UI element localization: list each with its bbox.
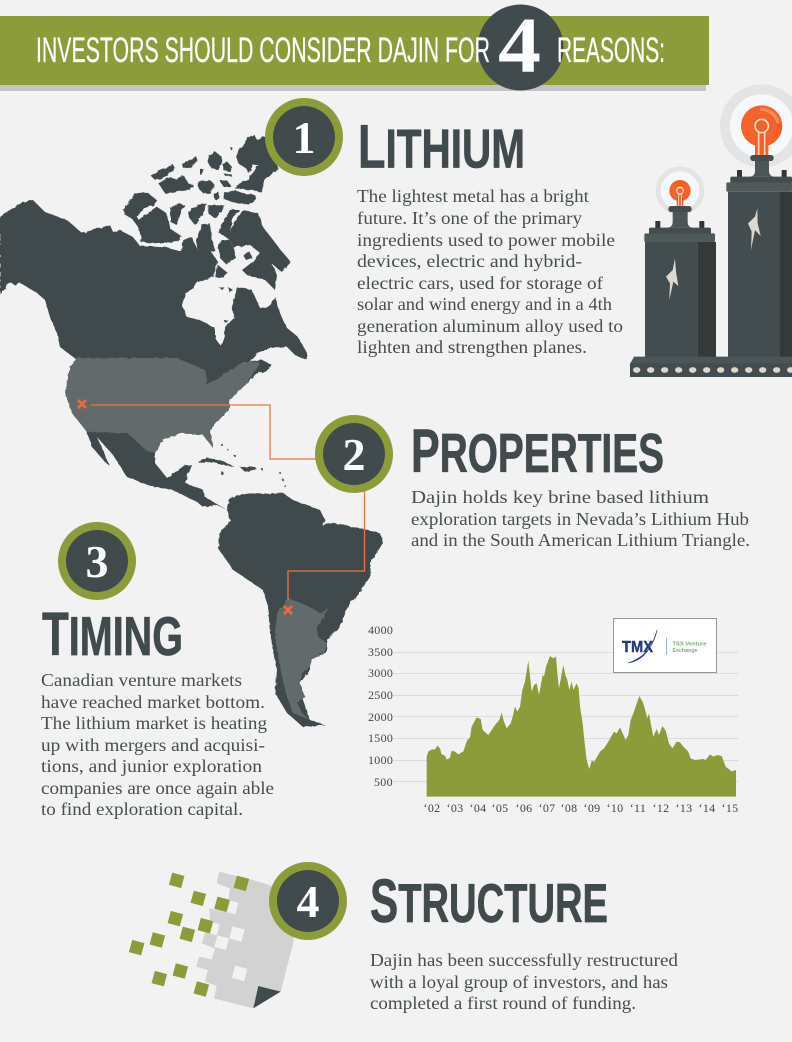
- map: Arctic islands: [123, 135, 278, 257]
- text: Lithium: future. It’s one of the primary: [357, 208, 582, 228]
- map: North America mainland: [0, 200, 307, 510]
- battery base: [630, 357, 792, 377]
- x axis labels: ‘10: [607, 801, 623, 815]
- text: Timing: Canadian venture markets: [41, 670, 242, 690]
- icon: dissolving document: [129, 872, 294, 1008]
- logo: TMX: [614, 618, 716, 672]
- heading: Timing: TIMING: [42, 600, 183, 668]
- x axis labels: ‘02: [424, 801, 440, 815]
- right battery: [720, 84, 792, 357]
- text: Lithium: The lightest metal has a bright: [357, 186, 589, 206]
- logo: TMX: Exchange: [672, 648, 698, 654]
- x axis labels: [424, 801, 738, 815]
- y axis labels: 3000: [368, 666, 393, 680]
- heading: Properties: PROPERTIES: [411, 417, 664, 485]
- text: Properties: [411, 487, 750, 550]
- text: Properties: and in the South American Lithium Triangle.: [411, 530, 750, 550]
- text: Structure: Dajin has been successfully restructured: [370, 950, 678, 970]
- y axis labels: 1500: [368, 731, 393, 745]
- text: Lithium: lighten and strengthen planes.: [357, 337, 587, 357]
- x axis labels: ‘04: [470, 801, 486, 815]
- left battery: [644, 166, 716, 357]
- text: Properties: exploration targets in Nevada’s Lithium Hub: [411, 509, 749, 529]
- area chart: TSX Venture index: [368, 618, 738, 815]
- text: Structure: with a loyal group of investors, and has: [370, 972, 668, 992]
- y axis labels: 2000: [368, 710, 393, 724]
- logo: TMX: TSX Venture: [672, 642, 706, 648]
- text: Timing: tions, and junior exploration: [41, 756, 262, 776]
- x axis labels: ‘14: [699, 801, 715, 815]
- map: Argentina: [275, 598, 328, 720]
- x axis labels: ‘08: [561, 801, 577, 815]
- text: Structure: [370, 950, 678, 1013]
- green pixels: [129, 873, 249, 997]
- icon: batteries with light bulbs: [630, 84, 792, 377]
- map: Baffin Island: [218, 210, 291, 290]
- map: United States: [65, 358, 260, 453]
- title banner: REASONS:: [557, 31, 665, 70]
- text: Timing: up with mergers and acquisi-: [41, 735, 265, 755]
- title banner: [0, 3, 709, 91]
- marker: Nevada: [78, 400, 86, 408]
- badge 2: [315, 415, 393, 493]
- chart area: [427, 656, 736, 797]
- x axis labels: ‘06: [516, 801, 532, 815]
- marker: South America: [284, 606, 292, 614]
- map: South America: [218, 493, 383, 727]
- text: Timing: have reached market bottom.: [41, 692, 265, 712]
- y axis labels: 500: [374, 775, 393, 789]
- text: Timing: [41, 670, 274, 819]
- title banner: INVESTORS SHOULD CONSIDER DAJIN FOR: [36, 31, 490, 70]
- heading: Lithium: LITHIUM: [358, 112, 525, 180]
- map: Caribbean islands: [198, 444, 286, 487]
- x axis labels: ‘11: [630, 801, 646, 815]
- page corner fold: [253, 986, 281, 1008]
- heading: Structure: STRUCTURE: [370, 867, 608, 935]
- text: Properties: Dajin holds key brine based lithium: [411, 487, 709, 507]
- map: North and South America: [0, 135, 383, 727]
- x axis labels: ‘12: [653, 801, 669, 815]
- text: Lithium: generation aluminum alloy used to: [357, 316, 623, 336]
- badge 3: [58, 522, 136, 600]
- y axis labels: 1000: [368, 753, 393, 767]
- badge 1: [265, 98, 343, 176]
- map: Melville Peninsula and Southampton Island: [215, 240, 252, 323]
- x axis labels: ‘15: [722, 801, 738, 815]
- text: Lithium: [357, 186, 623, 357]
- x axis labels: ‘09: [584, 801, 600, 815]
- x axis labels: ‘03: [447, 801, 463, 815]
- x axis labels: ‘07: [539, 801, 555, 815]
- x axis labels: ‘05: [492, 801, 508, 815]
- x axis labels: ‘13: [676, 801, 692, 815]
- y axis labels: 4000: [368, 623, 393, 637]
- y axis labels: 3500: [368, 645, 393, 659]
- text: Timing: The lithium market is heating: [41, 713, 267, 733]
- badge 1: 1: [292, 112, 316, 163]
- badge 2: 2: [342, 429, 366, 480]
- y axis labels: 2500: [368, 688, 393, 702]
- text: Lithium: solar and wind energy and in a 4th: [357, 294, 612, 314]
- badge 4: 4: [296, 876, 320, 927]
- text: Lithium: ingredients used to power mobile: [357, 230, 615, 250]
- badge 3: 3: [86, 536, 108, 587]
- text: Lithium: electric cars, used for storage of: [357, 273, 603, 293]
- text: Timing: to find exploration capital.: [41, 799, 243, 819]
- logo: TMX: TMX: [622, 639, 653, 656]
- text: Structure: completed a first round of funding.: [370, 993, 636, 1013]
- connector lines: [91, 405, 364, 600]
- text: Timing: companies are once again able: [41, 778, 274, 798]
- text: Lithium: devices, electric and hybrid-: [357, 251, 582, 271]
- title banner: 4: [498, 3, 541, 90]
- y axis labels: [368, 623, 393, 789]
- badge 4: [269, 862, 347, 940]
